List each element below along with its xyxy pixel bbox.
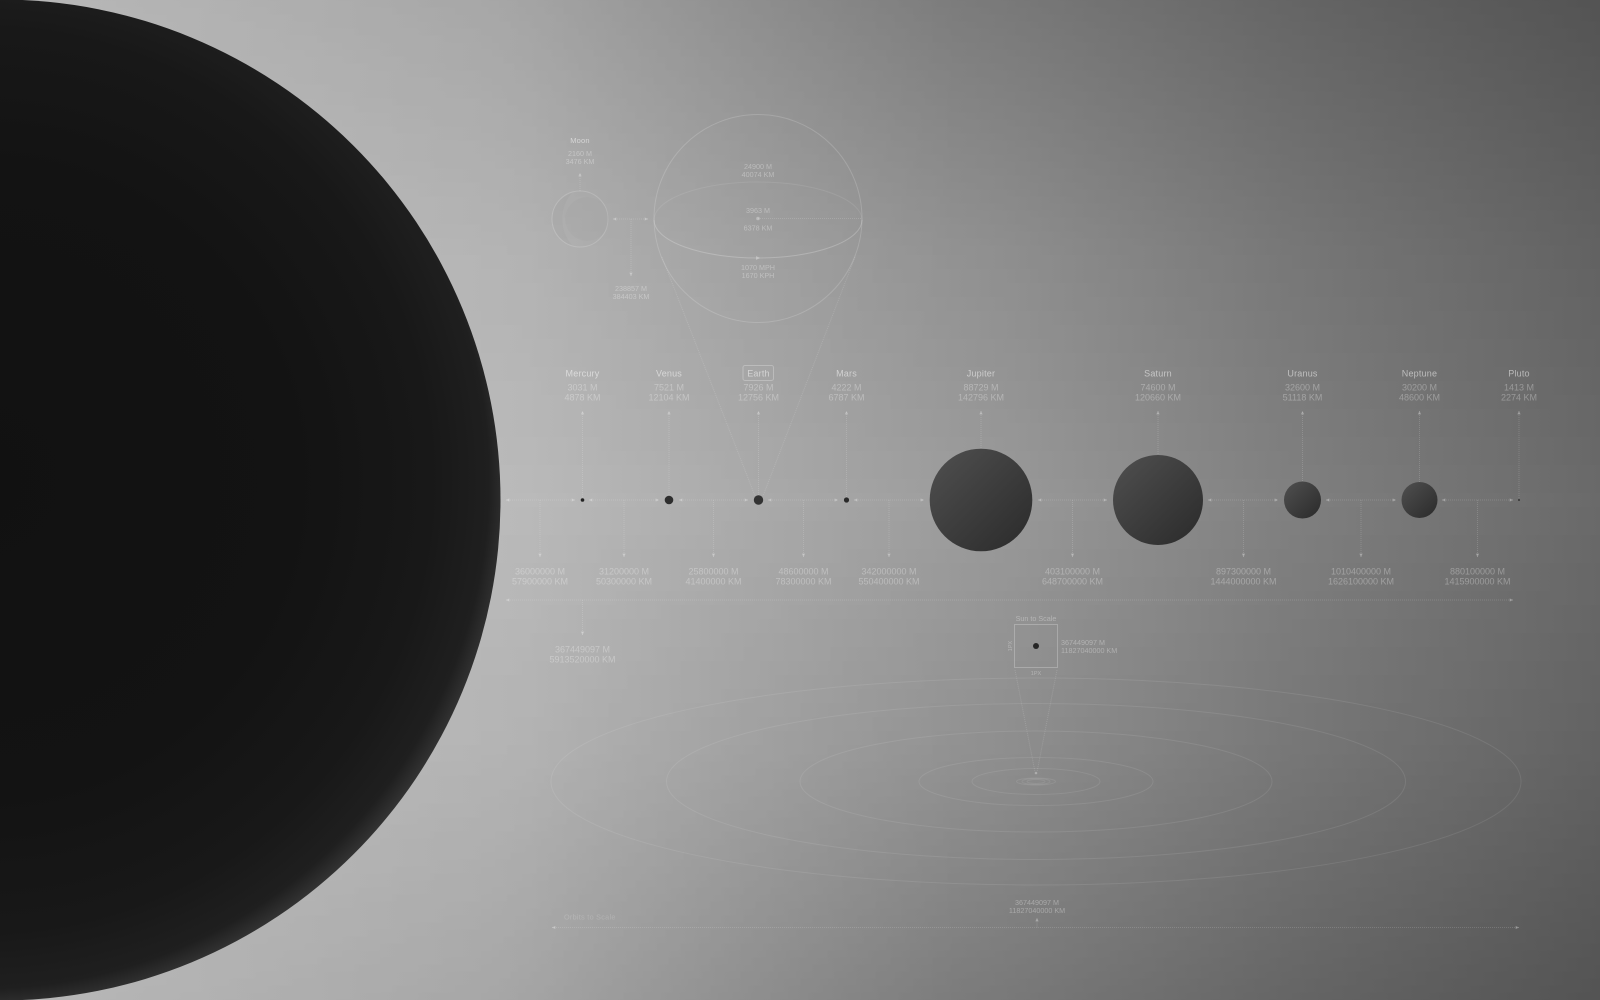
planet: Venus: 12104 KM — [648, 392, 690, 402]
zoom cone left — [662, 257, 755, 496]
planet: Earth: Earth — [747, 368, 770, 378]
circumference: 24900 M — [744, 162, 772, 171]
circumference — [742, 162, 774, 179]
rotation speed — [741, 263, 775, 280]
distance: Mercury to Venus — [596, 500, 652, 586]
sun to scale title: Sun to Scale — [1016, 614, 1056, 623]
equator back — [654, 182, 862, 220]
total distance bracket — [506, 600, 1513, 664]
planet: Uranus: 51118 KM — [1283, 392, 1322, 402]
planet: Earth: 7926 M — [743, 382, 774, 392]
center dot — [756, 217, 760, 220]
moon label: 3476 KM — [566, 157, 594, 166]
distance: Saturn to Uranus: 1444000000 KM — [1210, 576, 1277, 586]
icon: sun disc — [0, 0, 500, 1000]
equator front — [654, 220, 862, 258]
distance: Uranus to Neptune — [1328, 500, 1394, 586]
planet: Venus — [648, 368, 690, 504]
rotation speed: 1070 MPH — [741, 263, 775, 272]
distance: Neptune to Pluto — [1444, 500, 1511, 586]
orbits scale bar: 11827040000 KM — [1009, 906, 1065, 915]
planet: Saturn: 74600 M — [1140, 382, 1176, 392]
zoom cone right — [763, 257, 855, 496]
distance: Mars to Jupiter: 342000000 M — [861, 566, 917, 576]
cone tip — [1035, 772, 1037, 774]
planet: Neptune: 48600 KM — [1399, 392, 1440, 402]
planet: Neptune: Neptune — [1402, 368, 1437, 378]
planet: Mars: Mars — [836, 368, 857, 378]
distance: Mercury to Venus: 31200000 M — [599, 566, 649, 576]
planet: Saturn — [1113, 368, 1203, 545]
planet: Venus: 7521 M — [654, 382, 684, 392]
planet: Earth — [738, 366, 779, 505]
moon label — [566, 136, 594, 166]
distance: Mars to Jupiter — [858, 500, 920, 586]
planet: Saturn: 120660 KM — [1135, 392, 1181, 402]
icon: moon circle — [552, 191, 609, 247]
orbits scale bar — [552, 898, 1519, 928]
planet: Mercury — [564, 368, 601, 502]
distance: Earth to Mars — [775, 500, 832, 586]
panel: sun to scale — [1008, 614, 1117, 774]
earth sphere — [654, 114, 862, 322]
orbits to scale label: Orbits to Scale — [564, 912, 616, 922]
moon distance label: 238857 M — [615, 284, 647, 293]
moon leader — [579, 173, 581, 191]
moon label: 2160 M — [568, 149, 592, 158]
total distance bracket: 5913520000 KM — [549, 654, 616, 664]
distance: Sun to Mercury — [512, 500, 568, 586]
planet: Uranus: Uranus — [1287, 368, 1318, 378]
radius km: 6378 KM — [744, 224, 772, 232]
distance: Sun to Mercury: 57900000 KM — [512, 576, 568, 586]
distance: Earth to Mars: 48600000 M — [778, 566, 829, 576]
planet: Mars — [828, 368, 865, 503]
planet: Saturn: Saturn — [1144, 368, 1172, 378]
distance: Jupiter to Saturn: 403100000 M — [1045, 566, 1100, 576]
icon: sun scale dot — [1033, 643, 1039, 649]
distance: Saturn to Uranus: 897300000 M — [1216, 566, 1271, 576]
planet: Mercury: 3031 M — [567, 382, 598, 392]
panel: moon detail — [552, 136, 649, 301]
scale text — [1061, 638, 1117, 655]
planet: Pluto: 2274 KM — [1501, 392, 1537, 402]
rotation arrow — [756, 256, 760, 260]
panel: earth detail — [654, 114, 862, 496]
distance: Venus to Earth — [685, 500, 742, 586]
planet: Uranus — [1283, 368, 1322, 518]
distance: Mercury to Venus: 50300000 KM — [596, 576, 652, 586]
orbits scale bar: 367449097 M — [1015, 898, 1059, 907]
total distance bracket: 367449097 M — [555, 644, 610, 654]
moon distance arrow — [613, 218, 648, 220]
distance: Earth to Mars: 78300000 KM — [775, 576, 832, 586]
rotation speed: 1670 KPH — [742, 271, 774, 280]
distance: Uranus to Neptune: 1010400000 M — [1331, 566, 1391, 576]
planet: Mars: 4222 M — [831, 382, 862, 392]
distance: Neptune to Pluto: 880100000 M — [1450, 566, 1505, 576]
scale text: 11827040000 KM — [1061, 646, 1117, 655]
distance: Mars to Jupiter: 550400000 KM — [858, 576, 920, 586]
moon distance leader — [630, 219, 632, 276]
distance: Venus to Earth: 25800000 M — [688, 566, 739, 576]
planet: Pluto: 1413 M — [1504, 382, 1534, 392]
scale text: 367449097 M — [1061, 638, 1105, 647]
planet: Uranus: 32600 M — [1285, 382, 1320, 392]
planet: Jupiter: 88729 M — [963, 382, 999, 392]
scale height label: 1PX — [1008, 640, 1014, 651]
distance: Neptune to Pluto: 1415900000 KM — [1444, 576, 1511, 586]
moon label: Moon — [570, 136, 590, 145]
planet: Earth: 12756 KM — [738, 392, 779, 402]
panel: orbits to scale — [551, 678, 1521, 885]
distance: Venus to Earth: 41400000 KM — [685, 576, 742, 586]
cone left — [1015, 670, 1035, 772]
cone right — [1037, 670, 1057, 772]
planet: Neptune: 30200 M — [1402, 382, 1437, 392]
distance: Jupiter to Saturn — [1042, 500, 1103, 586]
distance: Sun to Mercury: 36000000 M — [515, 566, 565, 576]
radius line — [758, 218, 862, 220]
planet: Mercury: Mercury — [566, 368, 600, 378]
distance: Saturn to Uranus — [1210, 500, 1277, 586]
planet: Jupiter: 142796 KM — [958, 392, 1004, 402]
axis segments — [506, 499, 1513, 501]
moon distance label km: 384403 KM — [613, 292, 649, 301]
planet: Jupiter: Jupiter — [967, 368, 995, 378]
circumference: 40074 KM — [742, 170, 774, 179]
scale box — [1014, 624, 1058, 668]
planet: Neptune — [1399, 368, 1440, 518]
distance: Uranus to Neptune: 1626100000 KM — [1328, 576, 1394, 586]
planet: Venus: Venus — [656, 368, 682, 378]
radius miles: 3963 M — [746, 206, 770, 215]
planet: Jupiter — [930, 368, 1032, 551]
planet: Mercury: 4878 KM — [564, 392, 601, 402]
distance: Jupiter to Saturn: 648700000 KM — [1042, 576, 1103, 586]
planet: Mars: 6787 KM — [828, 392, 865, 402]
planet: Pluto: Pluto — [1508, 368, 1530, 378]
scale width label: 1PX — [1031, 671, 1042, 677]
planet: Pluto — [1501, 368, 1537, 501]
